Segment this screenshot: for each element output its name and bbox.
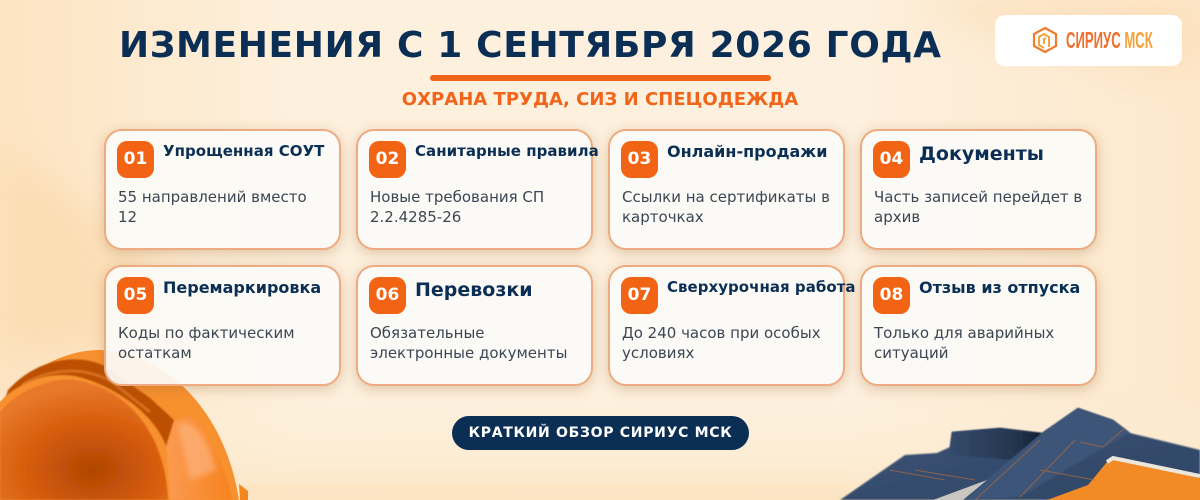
card 07: До 240 часов при особых условиях bbox=[622, 324, 821, 362]
card 06: Обязательные электронные документы bbox=[370, 324, 567, 362]
card 01 bbox=[104, 129, 341, 250]
card 07: Сверхурочная работа bbox=[667, 278, 856, 296]
card 04: 04 bbox=[880, 149, 903, 169]
title underline bbox=[430, 75, 771, 81]
card 05: 05 bbox=[124, 285, 147, 305]
card 01: 55 направлений вместо 12 bbox=[118, 188, 307, 226]
icon: folded workwear jacket bbox=[840, 406, 1200, 500]
card 08: Отзыв из отпуска bbox=[919, 278, 1080, 297]
card 01: 01 bbox=[124, 149, 147, 169]
card 02: Санитарные правила bbox=[415, 142, 599, 160]
card 07 bbox=[608, 265, 845, 386]
card 02 bbox=[356, 129, 593, 250]
logo: Сириус МСК bbox=[995, 15, 1182, 66]
card 07: 07 bbox=[628, 285, 651, 305]
card 03 bbox=[608, 129, 845, 250]
card 04: Часть записей перейдет в архив bbox=[874, 188, 1082, 226]
card 06 bbox=[356, 265, 593, 386]
card 08 bbox=[860, 265, 1097, 386]
title: ИЗМЕНЕНИЯ С 1 СЕНТЯБРЯ 2026 ГОДА bbox=[119, 25, 942, 66]
card 05 bbox=[104, 265, 341, 386]
card 03: 03 bbox=[628, 149, 651, 169]
card 02: Новые требования СП 2.2.4285-26 bbox=[370, 188, 544, 226]
card 05: Коды по фактическим остаткам bbox=[118, 324, 295, 362]
card 03: Онлайн-продажи bbox=[667, 142, 827, 161]
logo: Сириус МСК: СИРИУС МСК bbox=[1066, 27, 1153, 53]
card 06: Перевозки bbox=[415, 279, 533, 301]
footer pill bbox=[452, 416, 749, 450]
icon: orange hard hat bbox=[0, 350, 248, 500]
card 06: 06 bbox=[376, 285, 399, 305]
card 08: Только для аварийных ситуаций bbox=[874, 324, 1054, 362]
card 01: Упрощенная СОУТ bbox=[163, 142, 324, 160]
footer pill: КРАТКИЙ ОБЗОР СИРИУС МСК bbox=[469, 425, 732, 441]
card 03: Ссылки на сертификаты в карточках bbox=[622, 188, 830, 226]
card 04: Документы bbox=[919, 143, 1044, 165]
subtitle: ОХРАНА ТРУДА, СИЗ И СПЕЦОДЕЖДА bbox=[402, 89, 798, 110]
card 04 bbox=[860, 129, 1097, 250]
card 08: 08 bbox=[880, 285, 903, 305]
card 02: 02 bbox=[376, 149, 399, 169]
card 05: Перемаркировка bbox=[163, 278, 321, 297]
